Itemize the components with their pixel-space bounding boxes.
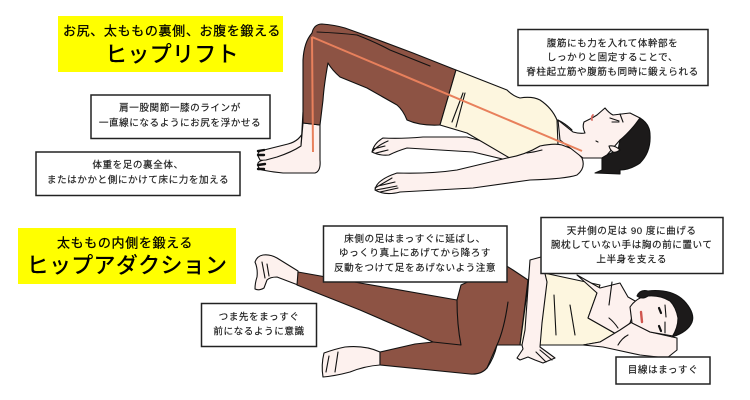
title: hip adduction: 太ももの内側を鍛える bbox=[57, 236, 193, 250]
torso top bbox=[440, 70, 558, 160]
chest and neck bbox=[577, 275, 637, 335]
callout: abdominal core: 腹筋にも力を入れて体幹部を bbox=[547, 38, 678, 50]
leg bbox=[303, 24, 456, 125]
lower foot bbox=[322, 347, 380, 377]
callout: upper leg and arm bbox=[541, 218, 723, 274]
near arm and shoulder bbox=[375, 144, 583, 194]
far foot bbox=[258, 112, 304, 165]
callout: upper leg and arm: 腕枕していない手は胸の前に置いて bbox=[551, 239, 713, 251]
callout: abdominal core: 脊柱起立筋や腹筋も同時に鍛えられる bbox=[526, 66, 699, 78]
figure: hip lift exercise bbox=[258, 24, 650, 194]
near foot bbox=[258, 123, 320, 173]
title: hip adduction: ヒップアダクション bbox=[27, 253, 227, 278]
title: hip lift: お尻、太ももの裏側、お腹を鍛える bbox=[63, 24, 281, 38]
callout: lower leg: 床側の足はまっすぐに延ばし、 bbox=[344, 233, 486, 245]
callout: body weight on feet bbox=[36, 152, 240, 196]
title: hip lift bbox=[58, 16, 283, 72]
far arm bbox=[372, 137, 515, 162]
details: face, creases, fingers bbox=[262, 262, 666, 372]
callout: abdominal core: しっかりと固定することで、 bbox=[547, 52, 678, 64]
callout: lower leg bbox=[324, 226, 507, 282]
callout: lower leg: 反動をつけて足をあげないよう注意 bbox=[334, 262, 496, 274]
callout: gaze bbox=[616, 357, 710, 384]
callout: shoulder hip knee line: 一直線になるようにお尻を浮かせる bbox=[99, 117, 261, 129]
orange alignment line bbox=[312, 37, 582, 152]
callout: body weight on feet: またはかかと側にかけて床に力を加える bbox=[47, 174, 229, 186]
title: hip adduction bbox=[18, 228, 236, 284]
ear bbox=[609, 146, 620, 152]
callout: lower leg: ゆっくり真上にあげてから降ろす bbox=[339, 247, 491, 259]
hair bbox=[595, 118, 650, 174]
figure: hip adduction exercise bbox=[255, 255, 693, 377]
callout: toes forward: つま先をまっすぐ bbox=[219, 311, 299, 323]
callout: gaze: 目線はまっすぐ bbox=[628, 364, 698, 376]
neck and face bbox=[558, 108, 644, 158]
callout: body weight on feet: 体重を足の裏全体、 bbox=[92, 159, 184, 171]
face bbox=[630, 294, 683, 336]
leg and hip bbox=[297, 265, 528, 374]
callout: shoulder hip knee line: 肩一股関節一膝のラインが bbox=[119, 102, 241, 114]
front arm and hand bbox=[517, 257, 555, 363]
raised foot bbox=[255, 255, 298, 290]
callout: toes forward: 前になるように意識 bbox=[213, 326, 305, 338]
callout: shoulder hip knee line bbox=[91, 95, 270, 138]
torso top bbox=[520, 270, 618, 345]
callout: upper leg and arm: 上半身を支える bbox=[596, 254, 667, 266]
details: fingers, creases, face bbox=[258, 32, 623, 192]
hair bbox=[637, 290, 693, 337]
title: hip lift: ヒップリフト bbox=[105, 42, 239, 67]
callout: toes forward bbox=[202, 304, 316, 346]
callout: abdominal core bbox=[518, 30, 708, 86]
supporting arm under head bbox=[583, 322, 677, 358]
callout: upper leg and arm: 天井側の足は 90 度に曲げる bbox=[567, 225, 697, 237]
